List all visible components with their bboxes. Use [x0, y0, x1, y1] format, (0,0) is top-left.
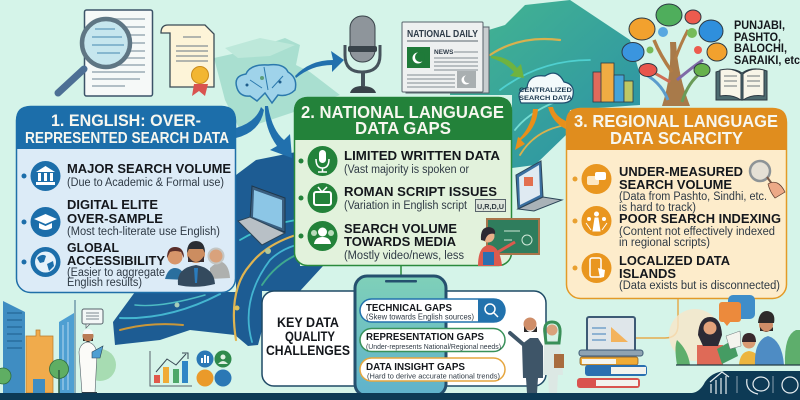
heading: key data quality challenges: QUALITY [285, 329, 335, 344]
text: under-measured search volume: is hard to track) [619, 202, 696, 214]
text: poor search indexing: (Content not effectively indexed [619, 226, 775, 238]
icon: magnifier with hand [750, 161, 785, 198]
icon: laptop on map [238, 186, 285, 245]
heading: panel 2: 2. NATIONAL LANGUAGE [301, 102, 504, 122]
icon: man with tablet and speech bubble [79, 309, 103, 393]
text: under-measured search volume: (Data from Pashto, Sindhi, etc. [619, 191, 767, 203]
heading: panel 2: DATA GAPS [355, 118, 451, 138]
heading: key data quality challenges: CHALLENGES [266, 343, 350, 358]
pill: data insight gaps [360, 358, 505, 381]
text: global accessibility [67, 240, 165, 289]
icon: newspaper: NATIONAL DAILY [407, 28, 478, 40]
heading: panel 3 [574, 111, 778, 148]
heading: panel 2 [301, 102, 504, 138]
panel: Regional language [566, 108, 787, 298]
text: regional language names: BALOCHI, [734, 43, 787, 55]
icon: family reading [669, 295, 800, 365]
icon: globe [22, 247, 60, 277]
text: limited written data [344, 148, 501, 176]
icon: centralized search data cloud: CENTRALIZED [519, 87, 572, 94]
text: poor search indexing: POOR SEARCH INDEXING [619, 211, 781, 226]
text: search volume towards media: (Mostly video/news, less [344, 250, 464, 262]
text: digital elite: (Most tech-literate use English) [67, 226, 220, 238]
pill: representation gaps: (Under-represents National/Regional needs) [366, 342, 501, 351]
pill: technical gaps [360, 298, 505, 322]
text: regional language names: PUNJABI, [734, 20, 785, 32]
icon: laptop with video [516, 161, 562, 211]
text: limited written data: (Vast majority is spoken or [344, 164, 469, 176]
text: major search volume [67, 161, 231, 189]
icon: centralized search data cloud: SEARCH DATA [519, 95, 572, 102]
text: search volume towards media: TOWARDS MEDIA [344, 234, 457, 249]
text: under-measured search volume [619, 164, 767, 214]
icon: microphone badge [298, 146, 338, 176]
icon: language tree with speech bubbles [622, 4, 727, 106]
text: localized data islands: ISLANDS [619, 266, 676, 281]
text: digital elite: DIGITAL ELITE [67, 197, 158, 212]
heading: key data quality challenges [266, 315, 350, 358]
panel: English [16, 106, 236, 292]
chart: trend bars [150, 351, 192, 386]
arrows from brain [236, 51, 344, 158]
pill: data insight gaps: (Hard to derive accurate national trends) [367, 372, 500, 380]
text: major search volume: MAJOR SEARCH VOLUME [67, 161, 231, 176]
icon: group of professionals [165, 241, 230, 287]
icon: laptop on book stack [577, 317, 647, 388]
icon: speech bubbles [572, 164, 612, 194]
pill: technical gaps: TECHNICAL GAPS [366, 303, 452, 314]
icon: newspaper: NEWS [434, 49, 454, 56]
text: poor search indexing: in regional scripts) [619, 237, 710, 249]
text: regional language names: PASHTO, [734, 32, 781, 44]
text: global accessibility: English results) [67, 277, 142, 289]
text: global accessibility: ACCESSIBILITY [67, 253, 165, 268]
icon: open book [716, 69, 767, 100]
text: global accessibility: (Easier to aggregate [67, 267, 165, 279]
footer icons [710, 372, 798, 394]
icon: city skyline [0, 300, 116, 393]
badge: URDU keys: U,R,D,U [477, 202, 504, 211]
text: limited written data: LIMITED WRITTEN DATA [344, 148, 501, 163]
icon: microphone [345, 16, 380, 93]
text: poor search indexing [619, 211, 781, 249]
pill: technical gaps: (Skew towards English sources) [366, 312, 474, 322]
text: major search volume: (Due to Academic & Formal use) [67, 177, 224, 189]
text: under-measured search volume: UNDER-MEASURED [619, 164, 743, 179]
panel: National language [294, 97, 539, 266]
icon: graduation cap [22, 207, 60, 237]
text: localized data islands: LOCALIZED DATA [619, 253, 731, 268]
heading: key data quality challenges: KEY DATA [277, 315, 339, 330]
text: localized data islands: (Data exists but is disconnected) [619, 280, 780, 292]
icon: brain network [236, 65, 296, 103]
heading: panel 1 [25, 111, 229, 147]
icon: mobile phone touch [572, 253, 612, 283]
icons: data circles [196, 350, 232, 386]
text: search volume towards media: SEARCH VOLUME [344, 221, 457, 236]
badge: URDU keys [476, 200, 506, 212]
icon: television [298, 183, 338, 213]
text: roman script issues: (Variation in English script [344, 200, 468, 212]
connector: panel 3 to bottom panel [600, 299, 678, 338]
heading: panel 3: 3. REGIONAL LANGUAGE [574, 111, 778, 131]
footer bar [0, 371, 800, 400]
icon: newspaper [402, 22, 489, 93]
icon: institution [22, 161, 60, 191]
text: global accessibility: GLOBAL [67, 240, 119, 255]
background map [113, 0, 640, 346]
text: roman script issues: ROMAN SCRIPT ISSUES [344, 184, 497, 199]
text: search volume towards media [344, 221, 464, 262]
text: roman script issues [344, 184, 497, 212]
icon: certificate [161, 25, 214, 96]
heading: panel 1: 1. ENGLISH: OVER- [51, 111, 201, 130]
icon: community [572, 206, 612, 236]
icon: centralized search data cloud [519, 73, 573, 103]
icon: teacher at chalkboard [478, 219, 539, 266]
icon: people [298, 221, 338, 251]
pill: representation gaps: REPRESENTATION GAPS [366, 332, 484, 343]
icon: document with magnifying glass [58, 10, 152, 96]
icon: smartphone [355, 276, 446, 396]
text: localized data islands [619, 253, 780, 292]
text: under-measured search volume: SEARCH VOLUME [619, 177, 732, 192]
heading: panel 1: REPRESENTED SEARCH DATA [25, 130, 229, 147]
text: regional language names [734, 20, 800, 67]
heading: panel 3: DATA SCARCITY [610, 128, 743, 148]
connector: panel 2 to phone [400, 266, 402, 276]
arrow: newspaper to cloud [491, 56, 524, 78]
arrows from cloud [515, 107, 568, 150]
text: digital elite: OVER-SAMPLE [67, 211, 163, 226]
icon: stack of coloured books [593, 63, 633, 102]
pill: data insight gaps: DATA INSIGHT GAPS [366, 362, 465, 373]
text: digital elite [67, 197, 220, 238]
icon: man and woman presenting [510, 318, 564, 393]
pill: representation gaps [360, 328, 505, 352]
panel: key data quality challenges [262, 276, 546, 396]
